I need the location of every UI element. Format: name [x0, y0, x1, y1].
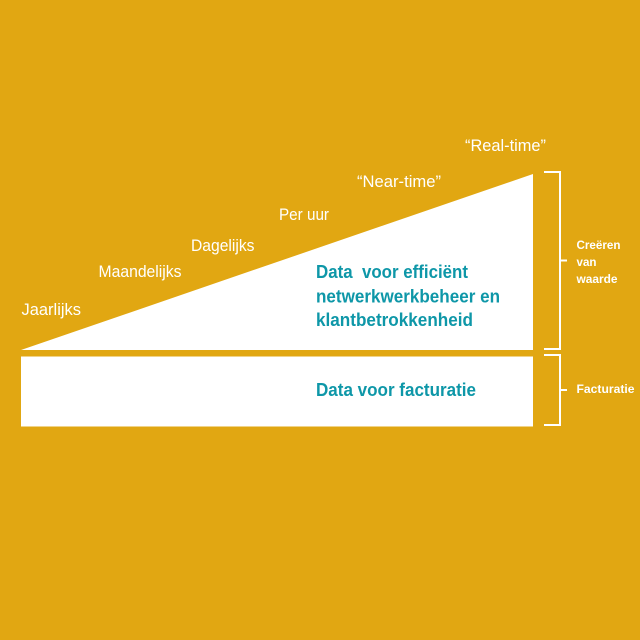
text block: value data description: [316, 261, 500, 330]
label: real-time: “Real-time”: [465, 137, 546, 155]
label: monthly: Maandelijks: [98, 263, 182, 281]
text block: value data description: Data voor efficiënt: [316, 261, 468, 282]
bracket: billing: [544, 355, 567, 425]
text block: billing data description: Data voor facturatie: [316, 379, 476, 400]
label: value creation: van: [576, 255, 596, 269]
label: value creation: Creëren: [576, 238, 620, 252]
label: value creation: [576, 238, 620, 286]
bracket: value creation: [544, 172, 567, 349]
frequency labels: [22, 137, 546, 319]
text block: value data description: klantbetrokkenheid: [316, 309, 473, 330]
label: billing: Facturatie: [576, 382, 635, 396]
label: value creation: waarde: [576, 272, 618, 286]
text block: value data description: netwerkwerkbeheer en: [316, 286, 500, 306]
label: hourly: Per uur: [279, 206, 329, 224]
panel: billing data rectangle: [21, 356, 533, 426]
label: daily: Dagelijks: [191, 237, 254, 255]
panel: value data triangle: [21, 174, 533, 350]
label: near-time: “Near-time”: [357, 173, 441, 191]
label: yearly: Jaarlijks: [22, 301, 81, 319]
